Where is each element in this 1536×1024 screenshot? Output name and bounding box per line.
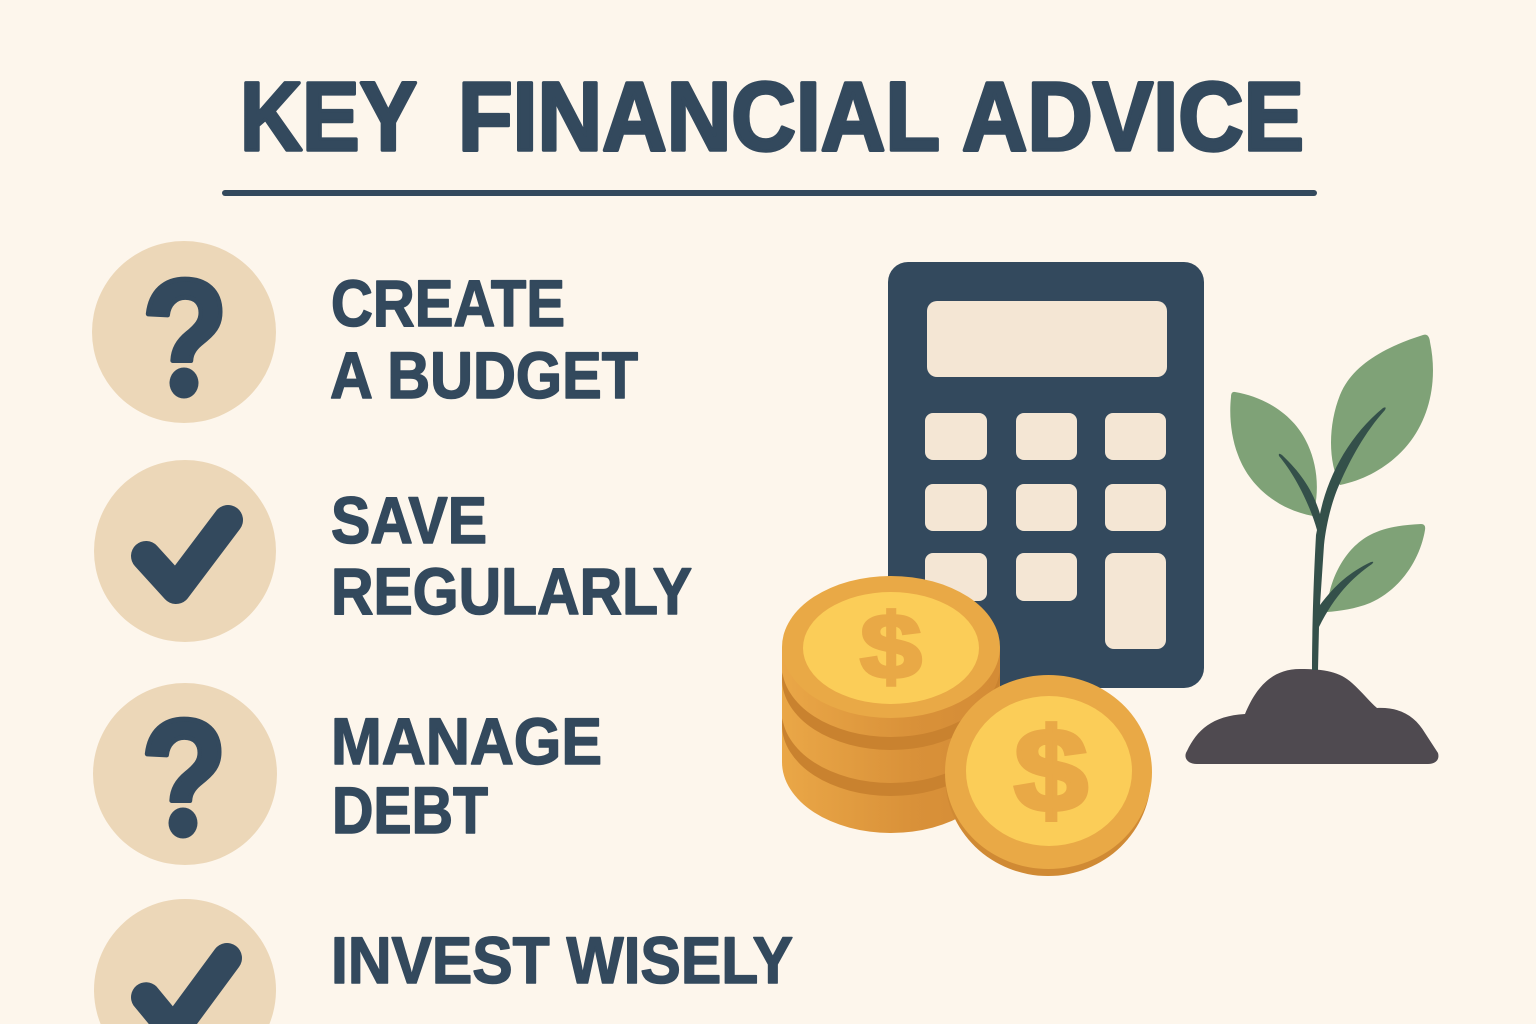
text: save regularly: SAVE	[331, 483, 487, 557]
icon: check mark	[94, 899, 276, 1024]
text: manage debt: MANAGE	[331, 704, 602, 778]
text: manage debt	[331, 704, 602, 847]
soil mound	[1185, 669, 1438, 764]
text: save regularly: REGULARLY	[331, 554, 692, 628]
advice item: create a budget	[92, 241, 638, 430]
leaf: lower right	[1327, 524, 1425, 612]
advice item: save regularly	[94, 460, 692, 642]
illustration: front coin: $	[1014, 705, 1088, 836]
leaf: top left	[1230, 392, 1317, 516]
title: ADVICE	[962, 62, 1304, 171]
icon: question mark: ?	[141, 245, 229, 430]
text: invest wisely: INVEST WISELY	[331, 923, 793, 997]
icon: question mark: ?	[140, 685, 228, 870]
icon: question mark	[92, 241, 276, 430]
calculator buttons	[925, 413, 1166, 649]
icon: check mark	[94, 460, 276, 642]
title	[240, 62, 1304, 171]
text: create a budget: A BUDGET	[330, 338, 638, 412]
title: KEY	[240, 62, 417, 171]
text: save regularly	[331, 483, 692, 628]
leaf: top right	[1331, 335, 1433, 485]
text: create a budget	[330, 266, 638, 412]
illustration: coin stack	[782, 576, 1000, 833]
advice item: invest wisely	[94, 899, 793, 1024]
illustration: coin stack: $	[860, 595, 922, 698]
text: manage debt: DEBT	[332, 773, 488, 847]
text: create a budget: CREATE	[331, 266, 565, 340]
illustration: calculator	[888, 262, 1204, 688]
title: FINANCIAL	[458, 62, 940, 171]
icon: question mark	[93, 683, 277, 870]
advice item: manage debt	[93, 683, 602, 870]
illustration: seedling plant	[1185, 335, 1438, 764]
plant stem	[1279, 407, 1386, 670]
illustration: front coin	[945, 675, 1152, 876]
calculator screen	[927, 301, 1167, 377]
